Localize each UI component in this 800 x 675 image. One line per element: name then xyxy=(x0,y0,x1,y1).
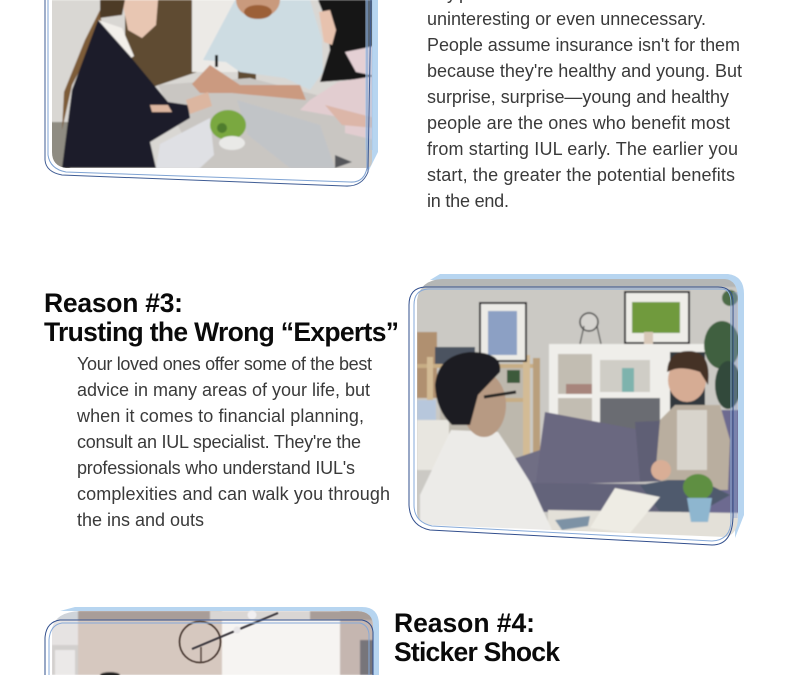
paragraph: reason 2 body text xyxy=(427,0,742,211)
paragraph: reason 3 body text: the ins and outs xyxy=(77,510,204,530)
heading: reason 4: Sticker Shock xyxy=(394,637,560,667)
heading: reason 4: Reason #4: xyxy=(394,608,535,638)
paragraph: reason 2 body text: in the end. xyxy=(427,191,509,211)
plant xyxy=(704,321,740,369)
icon: ring lamp xyxy=(180,610,278,662)
photo card: counselling session in living room xyxy=(409,274,744,545)
sofa xyxy=(535,412,640,485)
photo card: advisor meeting with couple xyxy=(45,0,378,186)
table, clipboard, pot xyxy=(548,510,740,540)
paragraph: reason 2 body text: start, the greater the potential benefits xyxy=(427,165,735,185)
paragraph: reason 2 body text: surprise, surprise—young and healthy xyxy=(427,87,729,107)
heading: reason 3: Reason #3: xyxy=(44,288,183,318)
paragraph: reason 3 body text: when it comes to financial planning, xyxy=(76,406,364,426)
paragraph: reason 3 body text: consult an IUL specialist. They're the xyxy=(77,432,361,452)
paragraph: reason 2 body text: People assume insurance isn't for them xyxy=(427,35,740,55)
paragraph: reason 2 body text: uninteresting or even unnecessary. xyxy=(427,9,706,29)
paragraph: reason 3 body text: professionals who understand IUL's xyxy=(77,458,355,478)
paragraph: reason 3 body text: advice in many areas of your life, but xyxy=(77,380,370,400)
heading: reason 3: Trusting the Wrong “Experts” xyxy=(44,317,399,347)
paragraph: reason 2 body text: because they're healthy and young. But xyxy=(427,61,742,81)
woman xyxy=(655,405,730,490)
wood shelf xyxy=(417,332,437,398)
paragraph: reason 2 body text: from starting IUL early. The earlier you xyxy=(427,139,738,159)
paragraph: reason 3 body text: Your loved ones offer some of the best xyxy=(77,354,372,374)
paragraph: reason 2 body text: people are the ones who benefit most xyxy=(427,113,730,133)
photo card: bright room with ring lamp xyxy=(45,607,379,675)
paragraph: reason 3 body text xyxy=(76,354,390,530)
wall art xyxy=(479,302,527,362)
man xyxy=(420,430,552,530)
white cabinet xyxy=(549,344,705,429)
heading: reason 4 xyxy=(394,608,560,667)
paragraph: reason 3 body text: complexities and can walk you through xyxy=(77,484,390,504)
heading: reason 3 xyxy=(44,288,399,347)
